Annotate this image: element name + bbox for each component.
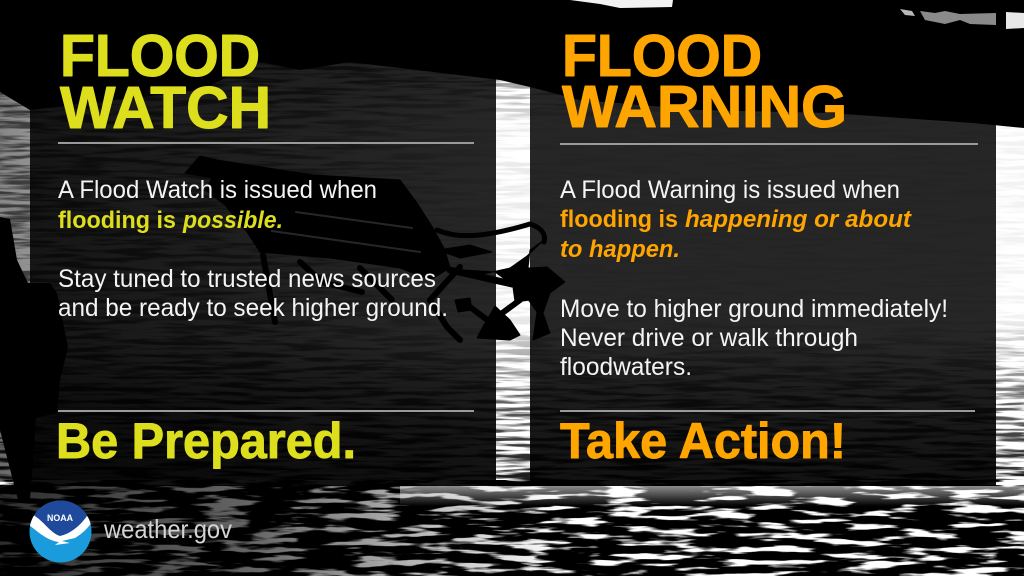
- tagline: take action: Take Action!: [560, 413, 846, 469]
- divider: watch bottom: [58, 410, 474, 412]
- text: watch definition: [58, 176, 377, 234]
- heading: flood warning: WARNING: [562, 73, 847, 140]
- heading: flood watch: FLOOD: [60, 22, 260, 89]
- text: warning advice: Never drive or walk through: [560, 324, 858, 352]
- divider: warning top: [560, 143, 978, 145]
- heading: flood warning: [562, 22, 847, 140]
- text: watch advice: Stay tuned to trusted news sources: [58, 265, 436, 293]
- text: watch advice: and be ready to seek higher ground.: [58, 294, 448, 322]
- text: warning definition: flooding is: [560, 206, 678, 233]
- divider: warning bottom: [560, 410, 975, 412]
- heading: flood warning: FLOOD: [562, 22, 762, 89]
- divider: watch top: [58, 142, 474, 144]
- panel: flood warning: [530, 22, 996, 486]
- heading: flood watch: [60, 22, 271, 141]
- text: watch definition: possible.: [182, 207, 283, 234]
- text: warning definition: happening or about: [685, 206, 912, 233]
- text: warning definition: [560, 176, 912, 263]
- text: watch advice: [58, 265, 448, 322]
- text: watch definition: flooding is: [58, 207, 176, 234]
- text: warning advice: Move to higher ground immediately!: [560, 295, 948, 323]
- text: warning advice: [560, 295, 948, 381]
- panel background: warning: [530, 28, 996, 486]
- text: warning definition: A Flood Warning is issued when: [560, 176, 900, 204]
- heading: flood watch: WATCH: [60, 74, 271, 141]
- silhouette: chair at left edge: [0, 217, 68, 500]
- panel: flood watch: [30, 22, 496, 486]
- text: watch definition: A Flood Watch is issued when: [58, 176, 377, 204]
- text: weather.gov: weather.gov: [103, 514, 232, 544]
- text: warning definition: to happen.: [560, 236, 680, 263]
- icon: NOAA logo: [30, 500, 92, 562]
- tagline: be prepared: Be Prepared.: [56, 413, 356, 469]
- text: warning advice: floodwaters.: [560, 353, 692, 381]
- panel background: watch: [30, 28, 496, 486]
- silhouette: flooded park bench: [185, 156, 565, 340]
- icon: NOAA logo: NOAA: [47, 513, 73, 523]
